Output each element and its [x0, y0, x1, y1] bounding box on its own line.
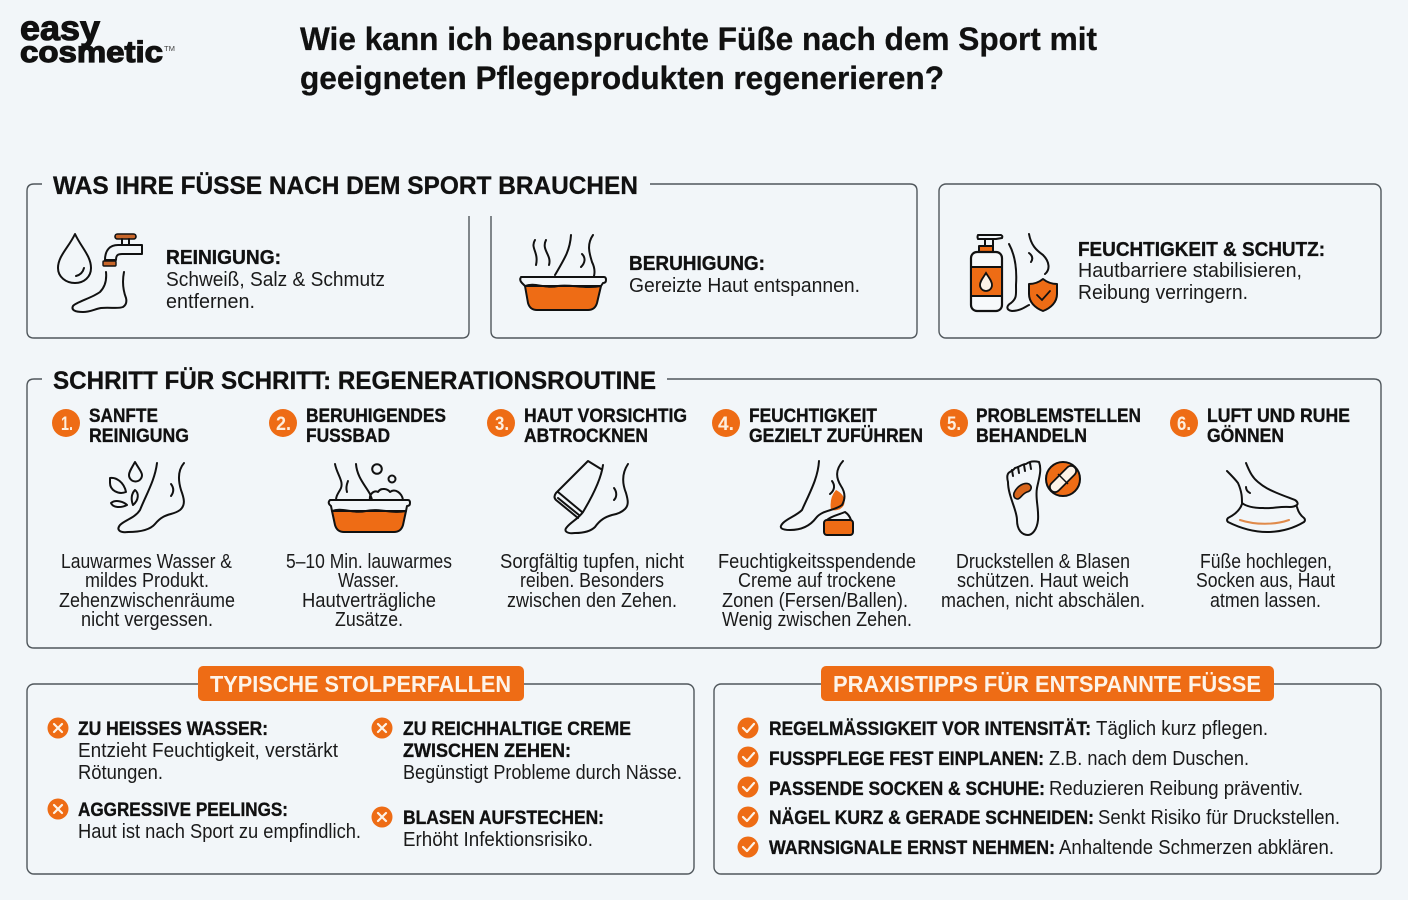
text: step 4 [718, 551, 916, 631]
step 2: FUSSBAD [306, 426, 390, 447]
text: beruhigung [629, 253, 860, 297]
icon: heel with cream jar [781, 461, 853, 535]
heading: was ihre füsse brauchen: WAS IHRE FÜSSE NACH DEM SPORT BRAUCHEN [53, 171, 638, 200]
text: step 6 [1196, 551, 1335, 612]
text: step 1: Zehenzwischenräume [59, 590, 235, 612]
item: zu reichhaltige creme: ZWISCHEN ZEHEN: [403, 741, 571, 762]
text: beruhigung: BERUHIGUNG: [629, 253, 765, 275]
title: Wie kann ich beanspruchte Füße nach dem Sport mit [300, 21, 1097, 57]
icon: foot bath with foam [329, 464, 410, 532]
text: reinigung: entfernen. [166, 291, 255, 313]
panel: beruhigung [491, 184, 917, 338]
text: step 2: Zusätze. [335, 609, 403, 631]
text: feuchtigkeit und schutz: Hautbarriere stabilisieren, [1078, 260, 1302, 282]
item: zu heisses wasser: Entzieht Feuchtigkeit, verstärkt [78, 740, 338, 762]
text: step 5: Druckstellen & Blasen [956, 551, 1130, 573]
heading: schritt für schritt: SCHRITT FÜR SCHRITT: REGENERATIONSROUTINE [53, 366, 656, 395]
tip 4: NÄGEL KURZ & GERADE SCHNEIDEN: [769, 808, 1094, 829]
tip 4: Senkt Risiko für Druckstellen. [1098, 807, 1340, 829]
text: feuchtigkeit und schutz [1078, 239, 1325, 304]
step 5 [940, 406, 1145, 612]
step 1: 1. [61, 414, 73, 435]
icon: foot on pillow [1227, 463, 1305, 532]
step 2 [269, 406, 452, 631]
tip 1: REGELMÄSSIGKEIT VOR INTENSITÄT: [769, 719, 1091, 740]
step 4: FEUCHTIGKEIT [749, 406, 877, 427]
tip 3 [738, 776, 1303, 800]
icon: foot with splash [110, 462, 184, 532]
step 4 [712, 406, 923, 631]
panel: reinigung [27, 184, 469, 338]
text: beruhigung: Gereizte Haut entspannen. [629, 275, 860, 297]
title: geeigneten Pflegeprodukten regenerieren? [300, 60, 944, 96]
step 6: GÖNNEN [1207, 426, 1284, 447]
step 5: PROBLEMSTELLEN [976, 406, 1141, 427]
text: step 6: Füße hochlegen, [1200, 551, 1332, 573]
step 2: 2. [276, 414, 291, 435]
step 3: ABTROCKNEN [524, 426, 648, 447]
text: step 2 [286, 551, 452, 631]
text: reinigung: REINIGUNG: [166, 247, 281, 269]
text: step 5 [941, 551, 1145, 612]
icon: sole with plaster [1007, 461, 1080, 535]
text: step 4: Zonen (Fersen/Ballen). [722, 590, 908, 612]
icon: towel and foot [554, 461, 628, 533]
text: feuchtigkeit und schutz: Reibung verringern. [1078, 282, 1248, 304]
item: aggressive peelings: AGGRESSIVE PEELINGS: [78, 800, 288, 821]
text: reinigung: Schweiß, Salz & Schmutz [166, 269, 385, 291]
logo: easy [20, 9, 101, 48]
item: zu heisses wasser [48, 718, 338, 784]
item: aggressive peelings [48, 798, 361, 843]
tip 3: PASSENDE SOCKEN & SCHUHE: [769, 779, 1045, 800]
step 6: LUFT UND RUHE [1207, 406, 1350, 427]
item: zu reichhaltige creme: Begünstigt Probleme durch Nässe. [403, 762, 682, 784]
logo: cosmetic [20, 36, 163, 69]
tip 1 [738, 718, 1268, 740]
tip 5: WARNSIGNALE ERNST NEHMEN: [769, 838, 1055, 859]
step 3: HAUT VORSICHTIG [524, 406, 687, 427]
step 3: 3. [495, 414, 509, 435]
logo [20, 9, 175, 69]
badge: typische stolperfallen [198, 666, 524, 701]
panel: typische stolperfallen [27, 666, 694, 874]
tip 3: Reduzieren Reibung präventiv. [1049, 778, 1303, 800]
panel: praxistipps [714, 666, 1381, 874]
tip 1: Täglich kurz pflegen. [1096, 718, 1268, 740]
tip 5: Anhaltende Schmerzen abklären. [1059, 837, 1334, 859]
icon: drop, tap and foot [58, 234, 142, 312]
text: step 5: schützen. Haut weich [957, 570, 1129, 592]
step 5: BEHANDELN [976, 426, 1087, 447]
step 3 [487, 406, 687, 612]
item: blasen aufstechen: BLASEN AUFSTECHEN: [403, 808, 604, 829]
icon: steaming foot bath [520, 235, 606, 310]
text: reinigung [166, 247, 385, 313]
text: step 3: zwischen den Zehen. [507, 590, 677, 612]
badge: typische stolperfallen: TYPISCHE STOLPERFALLEN [210, 671, 511, 697]
text: step 6: Socken aus, Haut [1196, 570, 1335, 592]
text: step 2: 5–10 Min. lauwarmes [286, 551, 452, 573]
item: zu heisses wasser: ZU HEISSES WASSER: [78, 719, 268, 740]
panel: feuchtigkeit und schutz [939, 184, 1381, 338]
panel: steps [27, 379, 1381, 648]
text: step 4: Wenig zwischen Zehen. [722, 609, 912, 631]
text: step 4: Creme auf trockene [738, 570, 896, 592]
title [300, 21, 1097, 96]
tip 2: Z.B. nach dem Duschen. [1049, 748, 1249, 770]
text: step 1: Lauwarmes Wasser & [61, 551, 233, 573]
text: step 1: nicht vergessen. [81, 609, 213, 631]
step 1: REINIGUNG [89, 426, 189, 447]
item: blasen aufstechen: Erhöht Infektionsrisiko. [403, 829, 593, 851]
step 4: 4. [718, 414, 734, 435]
item: blasen aufstechen [372, 806, 604, 851]
text: step 3: Sorgfältig tupfen, nicht [500, 551, 684, 573]
text: step 1: mildes Produkt. [85, 570, 209, 592]
item: zu reichhaltige creme: ZU REICHHALTIGE CREME [403, 719, 631, 740]
tip 5 [738, 836, 1334, 859]
step 5: 5. [947, 414, 961, 435]
text: step 3: reiben. Besonders [520, 570, 664, 592]
step 6: 6. [1177, 414, 1191, 435]
text: step 3 [500, 551, 684, 612]
tip 4 [738, 806, 1340, 829]
step 2: BERUHIGENDES [306, 406, 446, 427]
tip 2 [738, 746, 1249, 770]
text: step 2: Hautverträgliche [302, 590, 436, 612]
logo: TM [164, 46, 175, 53]
text: step 6: atmen lassen. [1210, 590, 1321, 612]
text: step 5: machen, nicht abschälen. [941, 590, 1145, 612]
badge: praxistipps: PRAXISTIPPS FÜR ENTSPANNTE FÜSSE [833, 671, 1261, 697]
icon: pump bottle, foot and shield [971, 234, 1057, 311]
text: step 4: Feuchtigkeitsspendende [718, 551, 916, 573]
text: feuchtigkeit und schutz: FEUCHTIGKEIT & SCHUTZ: [1078, 239, 1325, 261]
text: step 2: Wasser. [338, 570, 399, 592]
step 4: GEZIELT ZUFÜHREN [749, 426, 923, 447]
text: step 1 [59, 551, 235, 631]
item: zu reichhaltige creme [372, 718, 682, 784]
step 1: SANFTE [89, 406, 158, 427]
step 1 [52, 406, 235, 631]
item: aggressive peelings: Haut ist nach Sport zu empfindlich. [78, 821, 361, 843]
step 6 [1170, 406, 1350, 612]
tip 2: FUSSPFLEGE FEST EINPLANEN: [769, 749, 1044, 770]
item: zu heisses wasser: Rötungen. [78, 762, 163, 784]
